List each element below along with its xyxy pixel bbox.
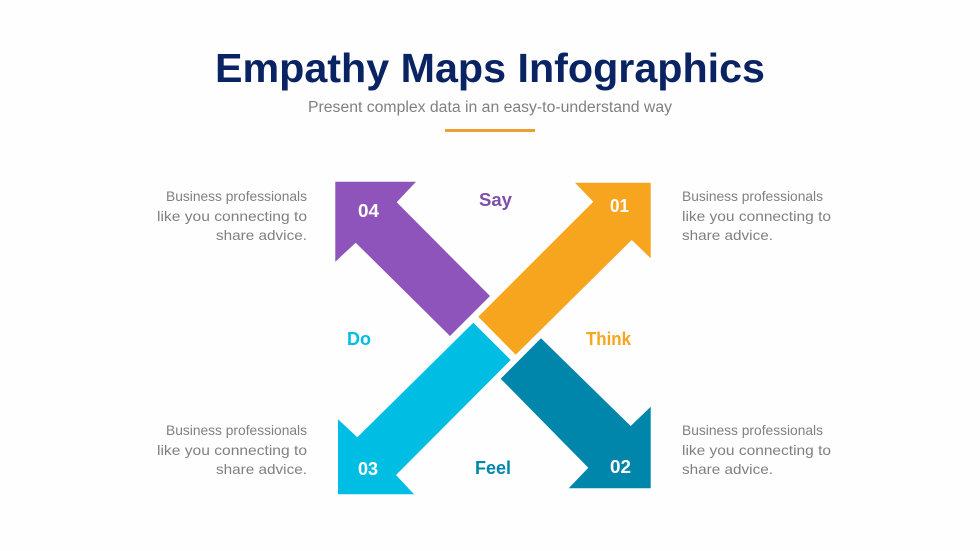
text block: bottom right: like you connecting to	[682, 442, 831, 458]
label: Feel: Feel	[475, 457, 511, 478]
text block: bottom right: share advice.	[682, 461, 773, 477]
subtitle: Present complex data in an easy-to-understand way	[308, 99, 672, 116]
accent underline	[445, 129, 535, 132]
text block: bottom right: Business professionals	[682, 422, 823, 438]
arrow 02: teal, pointing down-right: 02	[610, 456, 631, 477]
arrow 03: cyan, pointing down-left	[338, 323, 511, 494]
arrow 04: purple, pointing up-left: 04	[358, 200, 380, 221]
text block: top right: Business professionals	[682, 188, 823, 204]
text block: bottom left	[157, 422, 307, 477]
text block: bottom left: like you connecting to	[157, 442, 307, 458]
text block: top left: Business professionals	[166, 188, 307, 204]
arrow 01: orange, pointing up-right	[478, 183, 651, 355]
text block: bottom right	[682, 422, 831, 477]
text block: bottom left: Business professionals	[166, 422, 307, 438]
text block: bottom left: share advice.	[216, 461, 307, 477]
label: Do: Do	[347, 328, 371, 349]
label: Say: Say	[479, 189, 513, 210]
text block: top left: share advice.	[216, 227, 307, 243]
text block: top left	[157, 188, 307, 243]
arrow 02: teal, pointing down-right	[501, 338, 651, 488]
text block: top right: share advice.	[682, 227, 773, 243]
text block: top right: like you connecting to	[682, 208, 831, 224]
label: Think: Think	[586, 328, 632, 349]
text block: top right	[682, 188, 831, 243]
arrow 03: cyan, pointing down-left: 03	[358, 458, 378, 479]
title: Empathy Maps Infographics	[215, 45, 765, 91]
arrow 01: orange, pointing up-right: 01	[610, 195, 629, 216]
arrow 04: purple, pointing up-left	[335, 182, 490, 336]
text block: top left: like you connecting to	[157, 208, 307, 224]
